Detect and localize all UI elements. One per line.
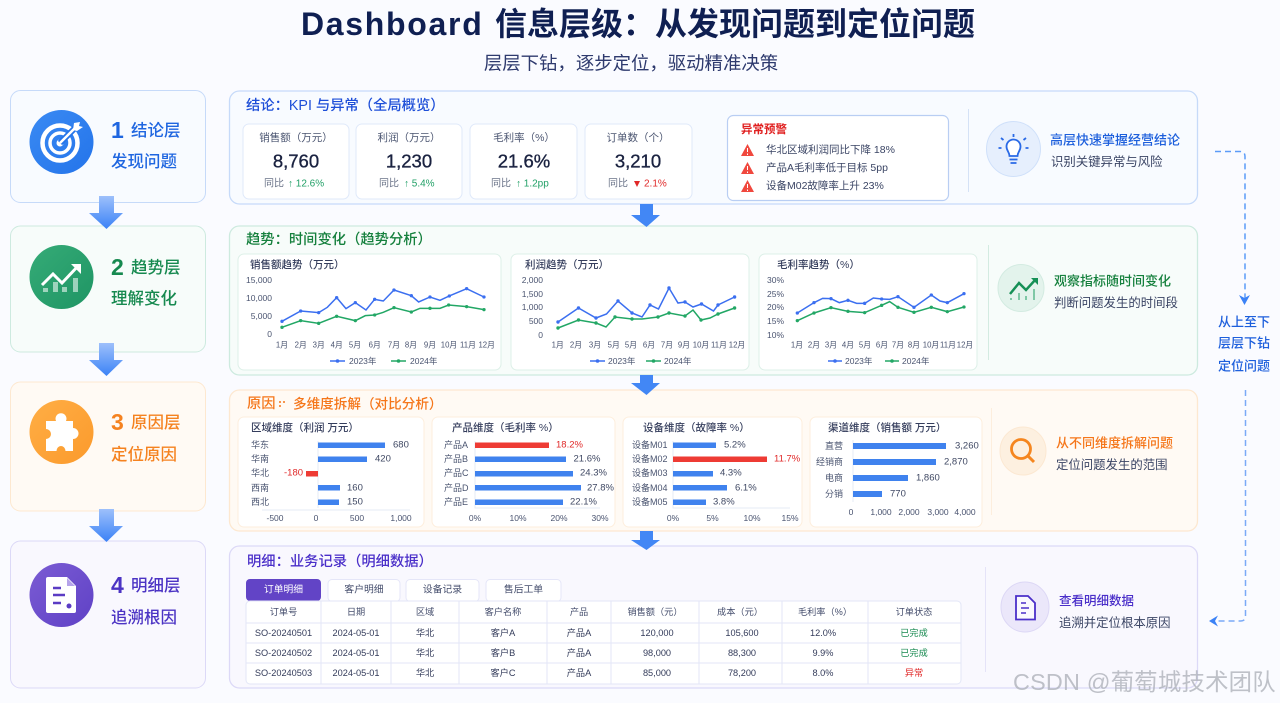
tabs: 设备记录 [423, 582, 462, 596]
panel heading: 原因 [247, 395, 276, 412]
bar chart: channel: 3,000 [927, 507, 949, 517]
chart: sales trend: 10月 [441, 340, 457, 350]
KPI card: profit: 1,230 [386, 150, 432, 172]
panel: KPI conclusions [230, 91, 1198, 204]
bar chart: product: 24.3% [580, 468, 607, 478]
tabs: 售后工单 [504, 582, 543, 596]
chart: margin trend [759, 254, 977, 370]
KPI card: profit: 同比 [379, 178, 399, 190]
bar chart: equipment: 4.3% [720, 468, 742, 478]
bar chart: channel: 0 [849, 507, 854, 517]
bar chart: region: 华南 [251, 453, 269, 464]
KPI card: sales [243, 124, 349, 199]
layer card 1: conclusion [10, 90, 206, 202]
table header: 毛利率（%） [798, 606, 852, 617]
bar chart: equipment: 3.8% [713, 496, 735, 508]
bar chart: product: 27.8% [587, 482, 614, 494]
icon: trend [30, 245, 94, 309]
bar chart: product: 18.2% [556, 440, 583, 450]
chart: sales trend: 销售额趋势（万元） [250, 258, 344, 271]
chart: margin trend: 7月 [892, 340, 904, 350]
KPI card: margin [470, 124, 577, 199]
bar chart: product: 21.6% [574, 454, 601, 464]
table row 3: SO-20240503 [255, 668, 312, 678]
bar chart: region: -180 [284, 468, 303, 478]
KPI card: orders: 同比 [608, 178, 628, 190]
icon: document small [1001, 582, 1049, 632]
icon: document [30, 563, 94, 627]
layer 3 name: 3 [111, 409, 124, 435]
panel: detail records [230, 546, 1198, 688]
chart: margin trend: 4月 [842, 340, 854, 350]
table row 1: 2024-05-01 [332, 628, 380, 638]
insight text: trend: 观察指标随时间变化 [1054, 274, 1171, 288]
chart: margin trend: 2024年 [902, 356, 930, 366]
bar chart: equipment [623, 417, 802, 527]
chart: profit trend: 5月 [608, 340, 620, 350]
tabs: 客户明细 [344, 582, 384, 596]
bar chart: channel: 4,000 [954, 507, 976, 517]
chart: sales trend: 6月 [369, 340, 381, 350]
bar chart: equipment: 设备M04 [632, 482, 668, 493]
bar chart: product: 20% [550, 513, 568, 523]
bar chart: region: 420 [375, 454, 391, 464]
bar chart: region: 西南 [251, 482, 269, 493]
chart: margin trend: 5月 [859, 340, 871, 350]
chart: profit trend: 2024年 [664, 356, 692, 366]
table row 2: 88,300 [728, 648, 756, 658]
table row 1: 12.0% [810, 628, 836, 638]
chart: sales trend: 15,000 [246, 275, 272, 285]
table header: 成本（元） [717, 606, 763, 617]
insight text: detail: 追溯并定位根本原因 [1059, 615, 1171, 630]
chart: sales trend: 7月 [388, 340, 400, 350]
panel heading: 明细：业务记录（明细数据） [247, 553, 433, 570]
chart: sales trend: 11月 [460, 340, 476, 350]
chart: profit trend: 2023年 [608, 356, 636, 366]
alert box [728, 116, 948, 200]
chart: sales trend: 8月 [405, 340, 417, 350]
chart: sales trend: 2023年 [349, 356, 377, 366]
table row 1 [255, 627, 928, 638]
chart: profit trend: 1,500 [522, 289, 543, 299]
bar chart: channel: 渠道维度（销售额 万元） [828, 421, 946, 434]
layer 3 name [111, 409, 180, 435]
chart: profit trend [511, 254, 749, 370]
table row 1: 华北 [416, 627, 434, 638]
chart: margin trend: 2月 [808, 340, 820, 350]
panel heading: 结论：KPI 与异常（全局概览） [246, 96, 445, 114]
table row 3: 78,200 [728, 668, 756, 678]
insight text: conclusion [1050, 132, 1180, 169]
layer 2 name [111, 254, 180, 280]
chart: profit trend: 3月 [589, 340, 601, 350]
chart: profit trend: 5月 [625, 340, 637, 350]
chart: sales trend: 5月 [349, 340, 361, 350]
bar chart: region: 西北 [251, 497, 269, 507]
bar chart: region: 1,000 [390, 513, 412, 523]
table header: 销售额（元） [627, 606, 683, 617]
KPI card: profit: ↑ 5.4% [404, 178, 435, 190]
table row 2: 已完成 [900, 647, 928, 658]
bar chart: region [238, 417, 424, 527]
table row 2: SO-20240502 [255, 648, 312, 658]
layer 3 name: 原因层 [131, 414, 180, 432]
alert 2: 产品A毛利率低于目标 5pp [766, 161, 888, 174]
table row 2 [255, 647, 928, 658]
bar chart: channel: 1,860 [916, 472, 940, 484]
KPI card: profit [356, 124, 462, 199]
bar chart: region: 区域维度（利润 万元） [251, 421, 359, 434]
bar chart: product [432, 417, 615, 527]
chart: sales trend: 4月 [331, 340, 343, 350]
chart: sales trend [238, 254, 501, 370]
chart: margin trend: 20% [767, 302, 784, 312]
drill-down label: 定位问题 [1218, 358, 1270, 374]
KPI card: orders [585, 124, 692, 199]
chart: sales trend: 2月 [295, 340, 307, 350]
chart: sales trend: 5,000 [251, 311, 272, 321]
chart: margin trend: 10月 [923, 340, 939, 350]
bar chart: equipment: 10% [743, 513, 761, 523]
bar chart: product: 产品E [444, 496, 468, 507]
layer 2 name: 趋势层 [131, 258, 180, 277]
table row 2: 2024-05-01 [332, 648, 380, 658]
icon: light bulb [986, 122, 1040, 176]
chart: sales trend: 3月 [313, 340, 325, 350]
panel heading: 趋势：时间变化（趋势分析） [246, 230, 432, 248]
table row 3: 客户C [490, 667, 516, 678]
arrow: layer 1 to 2 [89, 196, 123, 229]
chart: margin trend: 30% [767, 275, 784, 285]
layer 1 name [111, 117, 180, 143]
insight text: detail [1059, 593, 1171, 630]
bar chart: region: 0 [314, 513, 319, 523]
bar chart: product: 产品B [444, 453, 468, 464]
KPI card: orders: 2.1% [644, 178, 667, 190]
table header: 区域 [416, 606, 434, 617]
table row 3: 产品A [567, 667, 592, 678]
drill-down label [1218, 314, 1270, 374]
chart: sales trend: 0 [267, 329, 272, 339]
chart: sales trend: 9月 [424, 340, 436, 350]
table row 3: 85,000 [643, 668, 671, 678]
chart: profit trend: 0 [538, 330, 543, 340]
bar chart: channel: 2,000 [898, 507, 920, 517]
subtitle: 层层下钻，逐步定位，驱动精准决策 [484, 52, 778, 74]
bar chart: equipment: 11.7% [774, 454, 801, 464]
chart: margin trend: 6月 [876, 340, 888, 350]
chart: margin trend: 15% [767, 316, 784, 326]
chart: margin trend: 11月 [940, 340, 956, 350]
table row 1: 120,000 [640, 628, 674, 638]
icon: target [30, 110, 94, 174]
bar chart: channel: 直营 [825, 440, 843, 451]
table header: 订单号 [270, 606, 297, 617]
table row 2: 客户B [491, 647, 515, 658]
bar chart: product: 0% [469, 513, 482, 523]
table row 3 [255, 667, 923, 678]
table row 2: 华北 [416, 647, 434, 658]
KPI card: margin: 同比 [491, 178, 511, 190]
table row 3: 华北 [416, 667, 434, 678]
layer 4 name [111, 572, 180, 598]
bar chart: product: 产品D [444, 482, 469, 493]
bar chart: region: -500 [266, 513, 284, 523]
chart: margin trend: 25% [767, 289, 784, 299]
table row 2: 产品A [567, 647, 592, 658]
panel heading [247, 395, 443, 412]
layer 1 name: 结论层 [131, 121, 180, 140]
arrow: panel 1 to 2 [631, 204, 660, 227]
insight text: cause: 定位问题发生的范围 [1056, 457, 1168, 472]
chart: profit trend: 2月 [570, 340, 582, 350]
bar chart: region: 华东 [251, 439, 269, 450]
bar chart: channel: 电商 [825, 472, 843, 483]
layer 3 goal: 定位原因 [111, 444, 177, 464]
bar chart: equipment: 设备M05 [632, 496, 668, 507]
layer 4 name: 明细层 [131, 576, 180, 595]
arrow: dashed down to drill-down label [1215, 152, 1250, 305]
bar chart: equipment: 0% [667, 513, 680, 523]
insight text: trend: 判断问题发生的时间段 [1054, 295, 1178, 310]
table row 3: 异常 [905, 667, 923, 678]
bar chart: equipment: 6.1% [735, 482, 757, 494]
KPI card: margin: ↑ 1.2pp [516, 178, 549, 190]
KPI card: margin: 毛利率（%） [493, 131, 555, 144]
bar chart: channel: 1,000 [870, 507, 892, 517]
chart: profit trend: 11月 [711, 340, 727, 350]
insight text: detail: 查看明细数据 [1059, 593, 1134, 608]
chart: profit trend: 7月 [661, 340, 673, 350]
bar chart: product: 30% [591, 513, 609, 523]
layer 1 goal: 发现问题 [111, 152, 177, 171]
KPI card: orders: 订单数（个） [606, 131, 670, 144]
bar chart: region: 160 [347, 482, 363, 494]
layer 2 goal: 理解变化 [111, 288, 177, 308]
chart: sales trend: 1月 [276, 340, 288, 350]
alert 3: 设备M02故障率上升 23% [766, 179, 884, 192]
table row 3: 8.0% [813, 668, 833, 678]
table row 2: 98,000 [643, 648, 671, 658]
insight text: trend [1054, 274, 1178, 310]
chart: profit trend: 2,000 [522, 275, 543, 285]
bar chart: equipment: 设备M02 [632, 453, 668, 464]
insight text: cause: 从不同维度拆解问题 [1056, 436, 1173, 450]
layer 4 name: 4 [111, 572, 124, 598]
layer card 4: detail [10, 541, 206, 688]
chart: sales trend: 12月 [478, 340, 495, 350]
chart: sales trend: 10,000 [246, 293, 272, 303]
bar chart: channel: 经销商 [816, 456, 843, 467]
bar chart: region: 680 [393, 440, 409, 450]
chart: margin trend: 8月 [908, 340, 920, 350]
bar chart: channel: 2,870 [944, 456, 968, 468]
panel: cause breakdown [230, 390, 1198, 531]
table header [270, 606, 932, 617]
bar chart: product: 22.1% [570, 496, 597, 508]
icon: magnifier [1000, 427, 1046, 475]
table header: 订单状态 [896, 606, 932, 617]
bar chart: channel: 770 [890, 488, 906, 500]
bar chart: equipment: 5.2% [724, 440, 746, 450]
tabs [246, 579, 561, 602]
KPI card: sales: 同比 [264, 178, 284, 190]
arrow: layer 3 to 4 [89, 509, 123, 542]
watermark: CSDN @葡萄城技术团队 [1013, 669, 1276, 695]
title: 信息层级：从发现问题到定位问题 [495, 6, 975, 42]
KPI card: sales: ↑ 12.6% [288, 178, 324, 190]
chart: profit trend: 10月 [693, 340, 709, 350]
table row 1: SO-20240501 [255, 628, 312, 638]
data table [246, 601, 961, 684]
bar chart: equipment: 设备M03 [632, 467, 668, 478]
icon: trend small [998, 264, 1044, 312]
insight text: conclusion: 高层快速掌握经营结论 [1050, 132, 1180, 148]
alert box: 异常预警 [741, 122, 787, 136]
drill-down label: 层层下钻 [1218, 336, 1270, 350]
bar chart: channel: 3,260 [955, 440, 979, 452]
layer 4 goal: 追溯根因 [111, 608, 177, 627]
KPI card: sales: 8,760 [273, 150, 319, 172]
chart: margin trend: 1月 [791, 340, 803, 350]
KPI card: sales: 销售额（万元） [259, 131, 333, 144]
bar chart: region: 华北 [251, 467, 269, 478]
bar chart: region: 500 [350, 513, 364, 523]
bar chart: equipment: 5% [706, 513, 719, 523]
table row 1: 105,600 [725, 628, 759, 638]
chart: margin trend: 10% [767, 330, 784, 340]
insight text: conclusion: 识别关键异常与风险 [1051, 154, 1163, 169]
bar chart: region: 150 [347, 496, 363, 508]
KPI card: profit: 利润（万元） [378, 131, 440, 144]
chart: margin trend: 2023年 [845, 356, 873, 366]
chart: profit trend: 1,000 [522, 302, 543, 312]
table header: 产品 [570, 606, 588, 617]
panel: trends [230, 226, 1198, 375]
bar chart: channel: 分销 [825, 488, 843, 499]
arrow: panel 3 to 4 [631, 531, 660, 550]
table header: 客户名称 [485, 606, 521, 617]
bar chart: channel [810, 417, 982, 527]
bar chart: product: 产品A [444, 439, 468, 450]
chart: profit trend: 1月 [552, 340, 564, 350]
table row 1: 产品A [567, 627, 592, 638]
table row 1: 已完成 [900, 627, 928, 638]
table header: 日期 [347, 607, 365, 617]
bar chart: product: 10% [509, 513, 527, 523]
chart: profit trend: 500 [529, 316, 543, 326]
bar chart: equipment: 15% [781, 513, 799, 523]
tabs: 订单明细 [264, 582, 303, 596]
chart: margin trend: 毛利率趋势（%） [777, 258, 860, 271]
bar chart: product: 产品C [444, 467, 469, 478]
layer 1 name: 1 [111, 117, 124, 143]
chart: profit trend: 6月 [643, 340, 655, 350]
table row 1: 客户A [491, 627, 516, 638]
arrow: layer 2 to 3 [89, 343, 123, 376]
table row 3: 2024-05-01 [332, 668, 380, 678]
panel heading: 多维度拆解（对比分析） [293, 396, 443, 412]
chart: profit trend: 12月 [729, 340, 745, 350]
alert 1: 华北区域利润同比下降 18% [766, 143, 895, 156]
drill-down label: 从上至下 [1218, 314, 1270, 330]
table row 2: 9.9% [813, 648, 833, 658]
chart: sales trend: 2024年 [410, 356, 438, 366]
layer card 2: trend [10, 226, 206, 352]
insight text: cause [1056, 436, 1173, 472]
KPI card: margin: 21.6% [498, 150, 550, 172]
chart: profit trend: 利润趋势（万元） [525, 258, 609, 271]
KPI card: orders: 3,210 [615, 150, 661, 172]
arrow: panel 2 to 3 [631, 375, 660, 395]
layer card 3: cause [10, 382, 206, 511]
chart: margin trend: 3月 [825, 340, 837, 350]
chart: profit trend: 9月 [678, 340, 690, 350]
bar chart: equipment: 设备M01 [632, 439, 668, 450]
title: Dashboard [301, 6, 483, 42]
icon: puzzle [30, 400, 94, 464]
arrow: dashed back to detail panel [1209, 390, 1246, 626]
layer 2 name: 2 [111, 254, 124, 280]
bar chart: equipment: 设备维度（故障率 %） [643, 421, 750, 434]
bar chart: product: 产品维度（毛利率 %） [452, 421, 559, 434]
chart: margin trend: 12月 [957, 340, 973, 350]
